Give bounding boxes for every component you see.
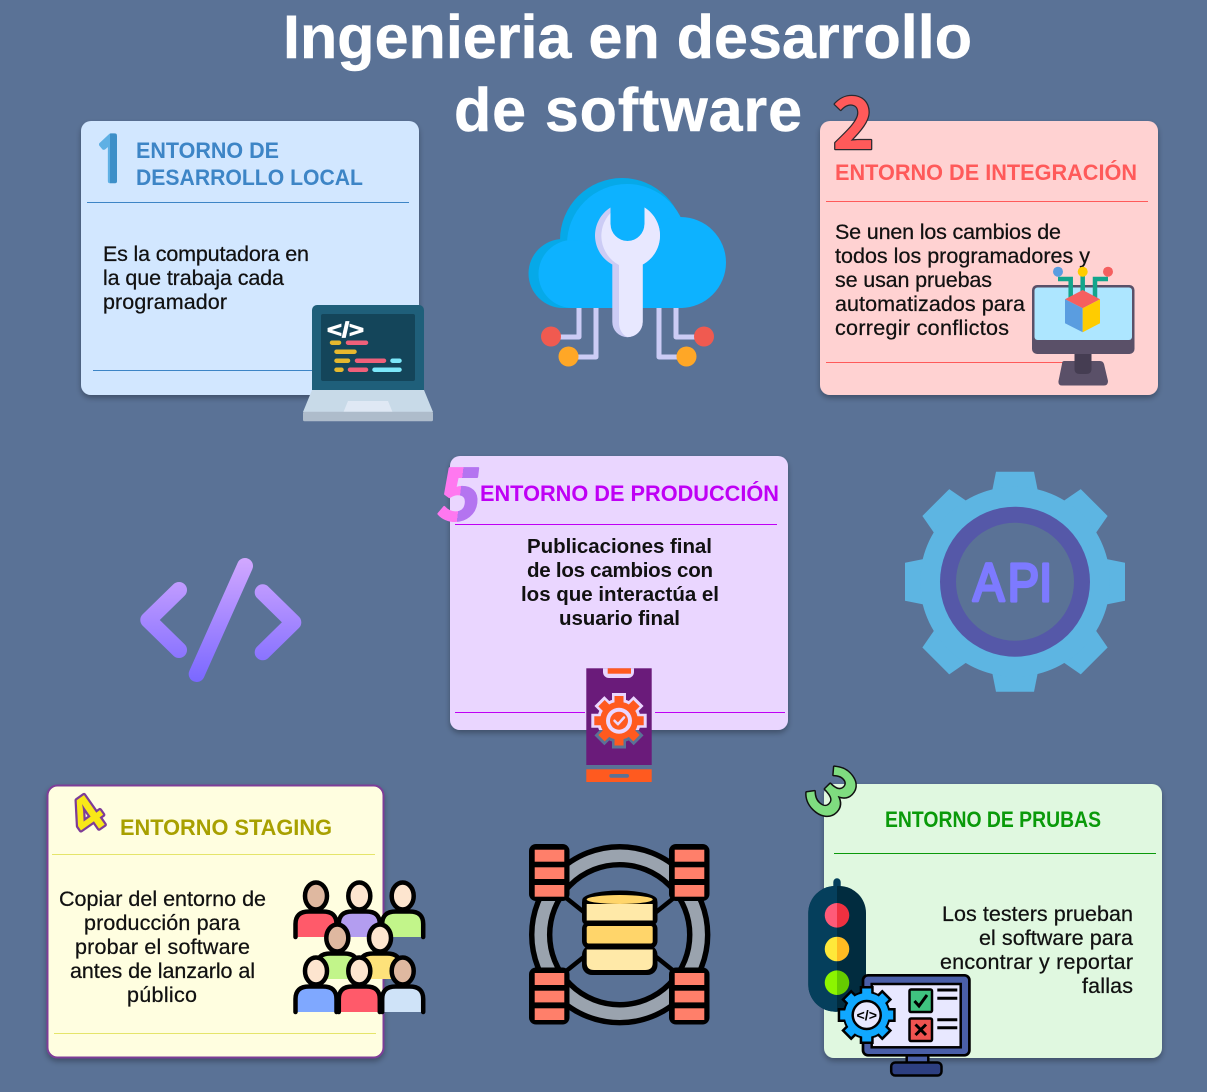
description — [940, 902, 1133, 998]
panel: entorno staging — [48, 775, 384, 1058]
card background — [81, 121, 419, 395]
description: fallas — [1082, 974, 1133, 998]
icon: code brackets — [148, 566, 293, 674]
description: el software para — [979, 926, 1133, 950]
heading: ENTORNO DE — [136, 138, 279, 163]
description: usuario final — [559, 607, 680, 630]
description: Copiar del entorno de — [59, 887, 266, 911]
description — [521, 535, 719, 630]
icon: API gear: API — [973, 552, 1052, 613]
number 4: 4 — [53, 775, 118, 850]
icon: traffic light — [808, 878, 866, 1012]
number 1: 1 — [92, 131, 130, 192]
description: la que trabaja cada — [103, 266, 284, 290]
number 3: 3 — [787, 740, 885, 838]
number 2: 2 — [832, 65, 875, 170]
heading: ENTORNO DE PRUBAS — [885, 807, 1101, 832]
icon: test monitor with gear: </> — [856, 1007, 877, 1023]
icon: database with servers — [529, 844, 710, 1024]
panel: entorno de integración — [820, 65, 1158, 395]
card background — [48, 786, 384, 1058]
title — [283, 3, 972, 144]
icon: cloud with wrench — [528, 178, 726, 366]
description: Es la computadora en — [103, 242, 309, 266]
title: Ingenieria en desarrollo — [283, 3, 972, 71]
description: se usan pruebas — [835, 268, 992, 292]
icon: API gear — [905, 472, 1125, 692]
description: probar el software — [75, 935, 250, 959]
card background — [824, 784, 1162, 1058]
description: Se unen los cambios de — [835, 220, 1061, 244]
description — [59, 887, 266, 1007]
description: todos los programadores y — [835, 244, 1090, 268]
heading: ENTORNO DE INTEGRACIÓN — [835, 160, 1137, 185]
title: de software — [454, 76, 802, 144]
description: público — [127, 983, 197, 1007]
description: Los testers prueban — [942, 902, 1133, 926]
description: programador — [103, 290, 227, 314]
heading: ENTORNO STAGING — [120, 815, 332, 840]
panel: entorno de pruebas — [787, 740, 1162, 1058]
description: automatizados para — [835, 292, 1025, 316]
icon: test monitor with gear — [838, 975, 969, 1076]
description: antes de lanzarlo al — [70, 959, 255, 983]
description — [103, 242, 309, 314]
icon: group of people — [296, 882, 423, 1012]
panel: entorno de producción — [433, 436, 788, 730]
heading: DESARROLLO LOCAL — [136, 165, 363, 190]
card background — [450, 456, 788, 730]
description: los que interactúa el — [521, 583, 719, 606]
description — [835, 220, 1090, 340]
icon: laptop with code — [303, 305, 433, 421]
description: producción para — [84, 911, 240, 935]
heading — [136, 138, 363, 190]
description: corregir conflictos — [835, 316, 1009, 340]
number 5: 5 — [433, 436, 489, 541]
panel: entorno de desarrollo local — [81, 121, 419, 395]
icon: monitor with cube — [1032, 267, 1134, 386]
heading: ENTORNO DE PRODUCCIÓN — [480, 481, 779, 506]
card background — [820, 121, 1158, 395]
description: Publicaciones final — [527, 535, 712, 558]
icon: phone with gear — [586, 668, 652, 782]
icon: laptop with code: </> — [327, 319, 364, 342]
description: de los cambios con — [527, 559, 713, 582]
description: encontrar y reportar — [940, 950, 1133, 974]
